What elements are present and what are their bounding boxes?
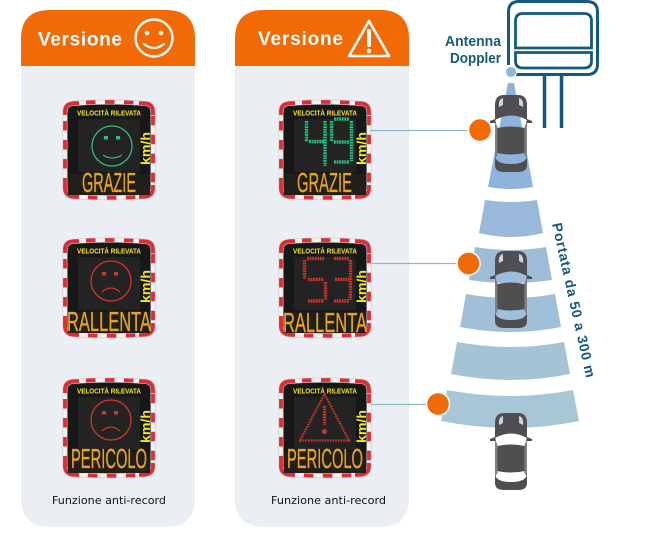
panel: warning version <box>235 10 409 527</box>
panel: smiley version <box>21 10 195 527</box>
sign: speed 53, RALLENTA <box>281 240 369 338</box>
header: warning version <box>235 10 409 66</box>
icon: antenna dot <box>506 66 516 78</box>
header: warning version: Versione <box>258 29 343 50</box>
sign: speed 49, GRAZIE <box>281 102 369 198</box>
sign: red frown, RALLENTA: km/h <box>139 270 153 303</box>
sign: warning triangle, PERICOLO <box>281 380 369 476</box>
icon: billboard on posts <box>508 2 598 128</box>
sign: speed 53, RALLENTA: RALLENTA <box>283 307 367 338</box>
icon: car middle <box>490 251 532 328</box>
label: Antenna Doppler: Antenna <box>445 34 502 50</box>
sign: speed 53, RALLENTA: km/h <box>355 270 369 303</box>
label: Antenna Doppler: Doppler <box>450 51 501 67</box>
connector and marker: warning triangle <box>371 392 450 416</box>
connector and marker: speed 49 <box>370 118 492 142</box>
label: Antenna Doppler <box>445 34 502 67</box>
sign: speed 49, GRAZIE: VELOCITÀ RILEVATA <box>293 108 357 118</box>
header: smiley version: Versione <box>38 30 122 50</box>
footer label: anti-record: Funzione anti-record <box>271 495 386 507</box>
icon: car far <box>490 413 532 490</box>
sign: warning triangle, PERICOLO: km/h <box>355 410 369 443</box>
sign: red frown, PERICOLO: PERICOLO <box>71 443 147 474</box>
diagram: radar beam bands <box>441 83 579 428</box>
icon: car near <box>490 95 532 172</box>
sign: speed 53, RALLENTA: VELOCITÀ RILEVATA <box>293 246 357 256</box>
header: smiley version <box>21 10 195 66</box>
sign: green smiley, GRAZIE <box>65 102 153 198</box>
sign: warning triangle, PERICOLO: PERICOLO <box>287 443 363 474</box>
sign: red frown, RALLENTA <box>65 240 153 337</box>
sign: red frown, RALLENTA: RALLENTA <box>67 306 151 337</box>
sign: speed 49, GRAZIE: GRAZIE <box>297 167 352 198</box>
sign: warning triangle, PERICOLO: VELOCITÀ RILEVATA <box>293 386 357 396</box>
sign: red frown, RALLENTA: VELOCITÀ RILEVATA <box>77 246 141 256</box>
sign: red frown, PERICOLO: VELOCITÀ RILEVATA <box>77 386 141 396</box>
sign: green smiley, GRAZIE: VELOCITÀ RILEVATA <box>77 108 141 118</box>
label: range: Portata da 50 a 300 m <box>549 221 599 379</box>
sign: speed 49, GRAZIE: km/h <box>355 132 369 165</box>
connector and marker: speed 53 <box>371 252 480 275</box>
sign: green smiley, GRAZIE: GRAZIE <box>82 167 136 198</box>
sign: green smiley, GRAZIE: km/h <box>139 132 153 165</box>
sign: red frown, PERICOLO <box>65 380 153 476</box>
footer label: anti-record: Funzione anti-record <box>52 495 166 507</box>
sign: red frown, PERICOLO: km/h <box>139 410 153 443</box>
